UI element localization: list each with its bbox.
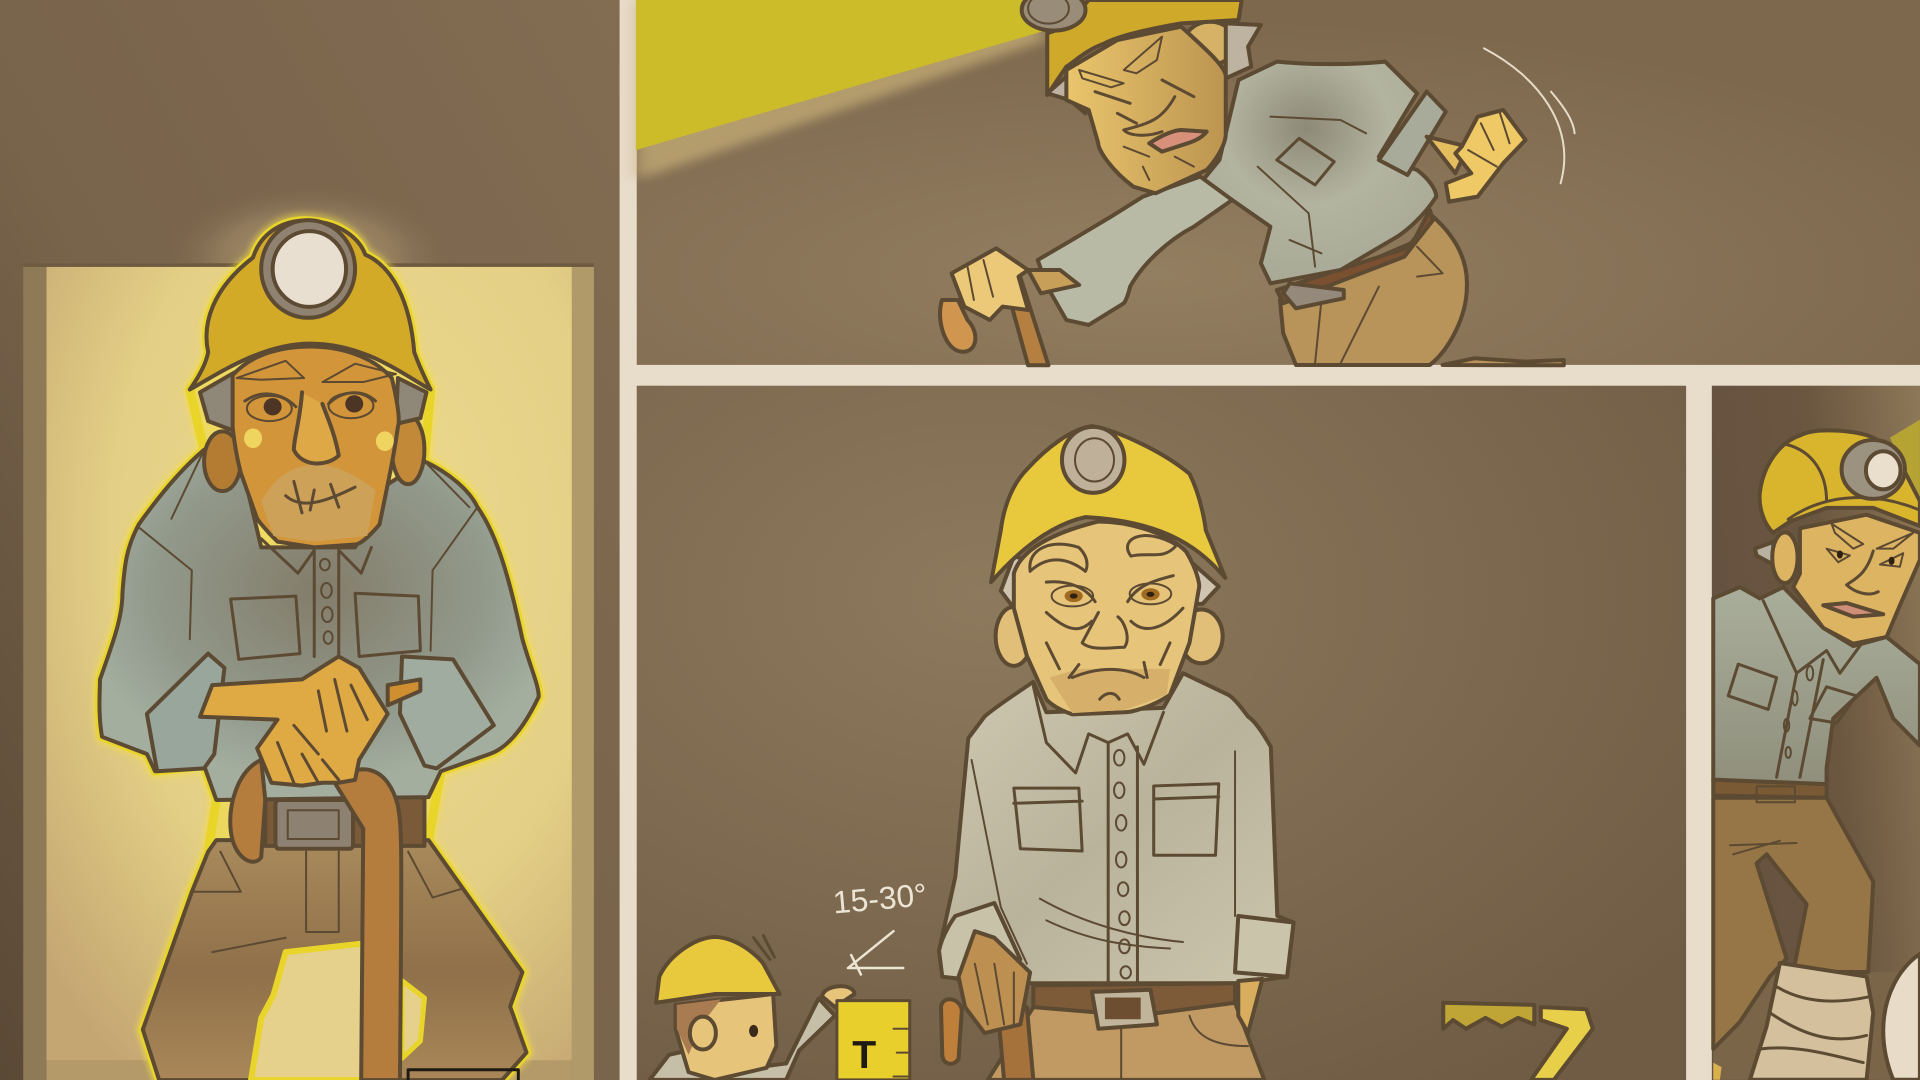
angle label: 15-30° <box>831 876 928 920</box>
miner figure <box>99 220 539 1080</box>
helmet halo <box>162 184 456 331</box>
head <box>676 994 776 1080</box>
helmet lamp <box>1022 0 1085 31</box>
collar <box>1763 601 1863 673</box>
eye bags and nose <box>1046 608 1183 648</box>
buttons <box>1114 750 1131 978</box>
raised fist <box>1446 110 1526 202</box>
foot <box>1443 358 1564 365</box>
face <box>233 346 399 547</box>
belt <box>1033 983 1235 1016</box>
eyebrows <box>1030 544 1087 571</box>
helmet lamp <box>261 220 355 318</box>
lit doorway <box>47 267 572 1060</box>
eyes <box>1827 549 1903 567</box>
helmet <box>991 426 1225 582</box>
nose <box>1124 97 1175 135</box>
shirt pockets <box>231 593 420 659</box>
shirt <box>99 450 539 800</box>
eyebrows <box>1832 524 1913 549</box>
nose <box>1847 551 1878 594</box>
door frame <box>23 263 594 1080</box>
lamp <box>754 936 774 959</box>
tape letter: T <box>852 1034 876 1077</box>
cuffs <box>939 903 1020 981</box>
helmet <box>1760 430 1920 533</box>
eyes <box>1046 576 1173 606</box>
cheek highlights <box>244 429 262 448</box>
pocket <box>1277 138 1334 185</box>
shirt <box>1713 587 1920 784</box>
forearm <box>1028 270 1079 293</box>
mouth <box>1823 603 1883 617</box>
mouth <box>1149 130 1207 152</box>
trousers <box>143 840 526 1080</box>
trousers <box>1280 217 1467 365</box>
helmet lamp <box>1842 440 1905 499</box>
cane hook <box>941 999 962 1064</box>
pockets <box>1728 664 1857 723</box>
boot hint <box>408 1070 518 1080</box>
hand <box>1713 1063 1722 1080</box>
mouth <box>1046 643 1170 699</box>
eyebrows <box>1079 37 1162 87</box>
ear <box>1772 532 1798 583</box>
eyebrows <box>237 361 396 382</box>
helmet <box>1047 0 1242 95</box>
collar <box>1033 686 1163 773</box>
placket <box>1108 743 1137 985</box>
arm and hands <box>200 656 388 786</box>
collar and placket <box>261 539 371 656</box>
helmet <box>656 937 780 1003</box>
placket <box>1777 660 1823 777</box>
face <box>1793 515 1920 644</box>
ears <box>204 431 241 491</box>
cane shaft <box>998 1007 1033 1080</box>
measuring tape body <box>837 1001 910 1080</box>
floor <box>1713 972 1920 1080</box>
eyes <box>245 393 375 421</box>
ear <box>1184 22 1235 65</box>
small miner figure <box>650 936 854 1080</box>
face <box>1014 521 1199 714</box>
beam glow <box>636 0 1047 180</box>
hair spikes <box>1755 542 1773 565</box>
nose <box>294 392 339 464</box>
ear <box>690 1017 716 1050</box>
face <box>1066 27 1226 193</box>
belt <box>1277 210 1433 303</box>
ears <box>996 607 1032 666</box>
squinting eyes <box>1095 80 1194 123</box>
hand on cane <box>952 248 1028 320</box>
right hand in pocket <box>1238 979 1262 1033</box>
yellow light beam <box>636 0 1047 150</box>
buckle <box>1092 990 1157 1029</box>
floor <box>47 1060 572 1080</box>
forearm <box>1427 137 1468 173</box>
trousers <box>1713 798 1873 1049</box>
sleeve <box>1038 177 1232 325</box>
belt <box>1713 780 1827 798</box>
cane <box>940 272 1049 365</box>
cane <box>230 760 401 1080</box>
hand <box>822 986 854 1007</box>
panel: sad miner with measuring tool <box>637 386 1686 1080</box>
hair <box>1226 23 1261 78</box>
motion lines <box>1484 48 1575 183</box>
helmet <box>190 221 431 390</box>
hand on cane <box>959 931 1030 1033</box>
pick head <box>1443 1003 1593 1080</box>
belt and buckle <box>265 797 424 849</box>
shirt <box>939 673 1294 983</box>
hair <box>1001 556 1219 608</box>
bandaged leg <box>1750 963 1873 1080</box>
body <box>650 998 835 1080</box>
panel: glowing miner in doorway <box>0 0 620 1080</box>
mouth wrinkles <box>286 481 355 513</box>
helmet lamp <box>1062 427 1124 493</box>
trousers <box>988 1003 1264 1080</box>
hair <box>200 372 426 433</box>
pockets <box>1014 784 1219 855</box>
light beam <box>1890 420 1920 501</box>
angle symbol <box>848 931 903 975</box>
eye <box>749 1025 758 1037</box>
panel: miner swinging arm with headlamp beam <box>636 0 1920 365</box>
buckle <box>1757 786 1795 802</box>
hair <box>677 999 721 1055</box>
buckle <box>1283 283 1344 308</box>
round boulder <box>1883 954 1920 1080</box>
shirt torso <box>1200 62 1436 283</box>
rear cuff <box>1379 92 1446 175</box>
door seen between legs <box>251 943 363 1080</box>
sleeve cuffs <box>147 654 224 771</box>
panel: angry miner with bandaged leg <box>1712 386 1920 1080</box>
pick handle <box>1531 1007 1593 1080</box>
beard <box>1050 669 1170 713</box>
